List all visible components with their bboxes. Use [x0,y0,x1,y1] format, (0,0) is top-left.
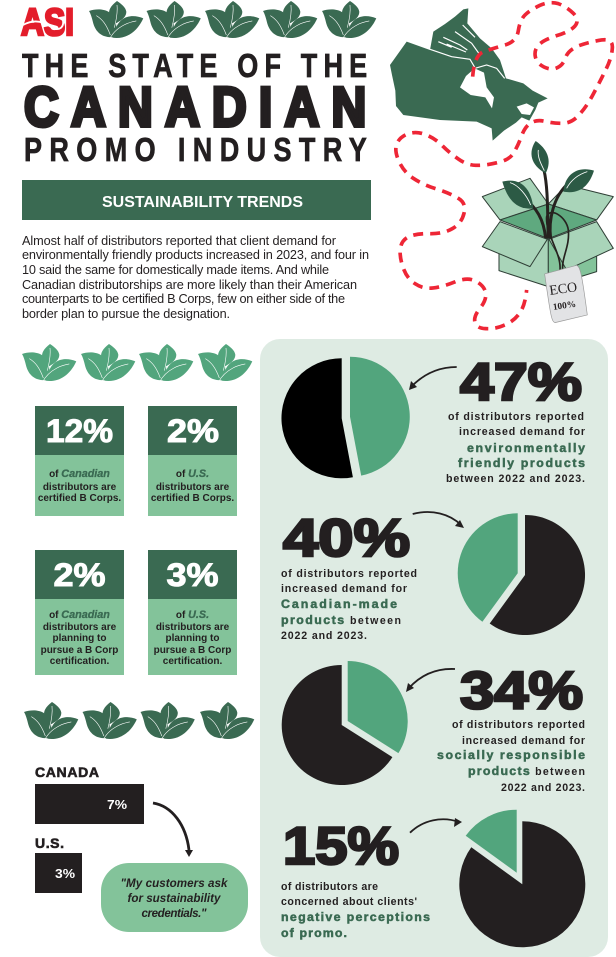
stat: 40%: products between [281,613,401,627]
stat: 47%: environmentally [467,441,585,455]
bar chart: Canada vs U.S.: U.S. [35,835,64,851]
stat: 47%: increased demand for [459,426,585,438]
stat: 15% [281,817,430,940]
title [22,49,367,169]
stat: 40%: 2022 and 2023. [281,630,367,642]
stat: 15%: concerned about clients' [281,896,417,908]
intro text: environmentally friendly products increased in 2023, and four in [22,248,369,262]
stat card: 2% U.S. certified: 2% [167,413,219,449]
dashed route line [396,3,612,329]
stat card: 12% Canadian certified: distributors are [43,482,117,493]
icon: map of Canada [390,8,548,141]
stat: 47%: of distributors reported [448,411,584,423]
stat: 40% [281,509,417,642]
stat card: 2% Canadian planning [35,550,124,675]
pie chart: 47% [281,357,410,478]
intro text [22,234,369,321]
stat card: 2% Canadian planning: distributors are [43,622,117,633]
callout: customer quote: for sustainability [128,892,221,905]
stat card: 2% U.S. certified: of U.S. [176,468,209,480]
stat card: 3% U.S. planning: of U.S. [176,609,209,621]
stat card: 2% U.S. certified [148,406,237,516]
stat: 40%: of distributors reported [281,568,417,580]
intro text: 10 said the same for domestically made items. And while [22,263,329,277]
stat card: 12% Canadian certified: of Canadian [49,468,110,480]
bar chart: Canada vs U.S. [35,764,144,893]
intro text: Canadian distributorships are more likely than their American [22,278,357,292]
stat: 47%: between 2022 and 2023. [446,473,585,485]
stat card: 12% Canadian certified: 12% [46,413,113,449]
stat: 34% [437,662,585,794]
callout: customer quote: credentials." [142,907,207,920]
stat: 15%: of promo. [281,926,347,940]
intro text: counterparts to be certified B Corps, few on either side of the [22,292,345,306]
stat card: 2% Canadian planning: planning to [53,633,106,644]
arrow: 15% [410,818,462,833]
stat: 34%: 2022 and 2023. [501,782,585,794]
heading band: sustainability trends [22,180,371,220]
stat card: 3% U.S. planning: 3% [166,557,218,593]
stat card: 2% U.S. certified: distributors are [156,482,230,493]
stat card: 3% U.S. planning [148,550,237,675]
arrow: 47% [409,367,457,390]
stat: 34%: 34% [460,662,583,720]
intro text: border plan to pursue the designation. [22,307,230,321]
stat: 34%: socially responsible [437,748,585,762]
stat card: 3% U.S. planning: pursue a B Corp [154,645,231,656]
title: CANADIAN [24,77,366,139]
stat card: 2% U.S. certified: certified B Corps. [151,493,234,504]
callout: customer quote: "My customers ask [120,877,228,890]
bar chart: Canada vs U.S.: CANADA [35,764,99,780]
stat card: 3% U.S. planning: distributors are [156,622,230,633]
stat card: 3% U.S. planning: planning to [166,633,219,644]
arrow: 34% [406,669,455,692]
icon: eco box with plant and tag: 100% [552,300,577,313]
arrow: bar to quote [153,803,193,857]
leaf row: top [89,1,376,40]
stat: 47% [446,353,585,485]
callout: customer quote [101,863,248,932]
panel: demand statistics [260,339,608,957]
stat: 15%: 15% [283,817,399,876]
stat card: 2% Canadian planning: 2% [54,557,106,593]
heading band: sustainability trends: SUSTAINABILITY TRENDS [102,194,303,211]
stat card: 2% Canadian planning: pursue a B Corp [41,645,118,656]
stat: 40%: Canadian-made [281,597,397,611]
pie chart: 40% [458,513,585,635]
icon: eco box with plant and tag [482,141,613,323]
stat: 34%: products between [468,764,585,778]
stat: 40%: 40% [283,509,410,568]
stat: 15%: of distributors are [281,881,378,893]
stat: 15%: negative perceptions [281,910,430,924]
leaf row: dark green [24,702,254,741]
stat card: 12% Canadian certified [35,406,124,516]
bar chart: Canada vs U.S.: 3% [55,866,75,881]
logo: ASI: ASI [21,2,74,44]
stat: 47%: friendly products [458,456,585,470]
stat: 47%: 47% [460,353,582,412]
stat card: 2% Canadian planning: of Canadian [49,609,110,621]
stat: 34%: of distributors reported [452,719,585,731]
intro text: Almost half of distributors reported that client demand for [22,234,337,248]
title: THE STATE OF THE [22,49,367,85]
title: PROMO INDUSTRY [24,133,367,169]
stat card: 12% Canadian certified: certified B Corps. [38,493,121,504]
leaf row: light green [22,344,252,383]
arrow: 40% [413,512,464,528]
icon: eco box with plant and tag: ECO [548,280,578,299]
stat card: 2% Canadian planning: certification. [50,656,109,667]
bar chart: Canada vs U.S.: 7% [107,797,127,812]
pie chart: 34% [282,661,408,785]
stat: 34%: increased demand for [462,735,585,747]
pie chart: 15% [459,810,585,947]
stat card: 3% U.S. planning: certification. [163,656,222,667]
stat: 40%: increased demand for [281,583,407,595]
